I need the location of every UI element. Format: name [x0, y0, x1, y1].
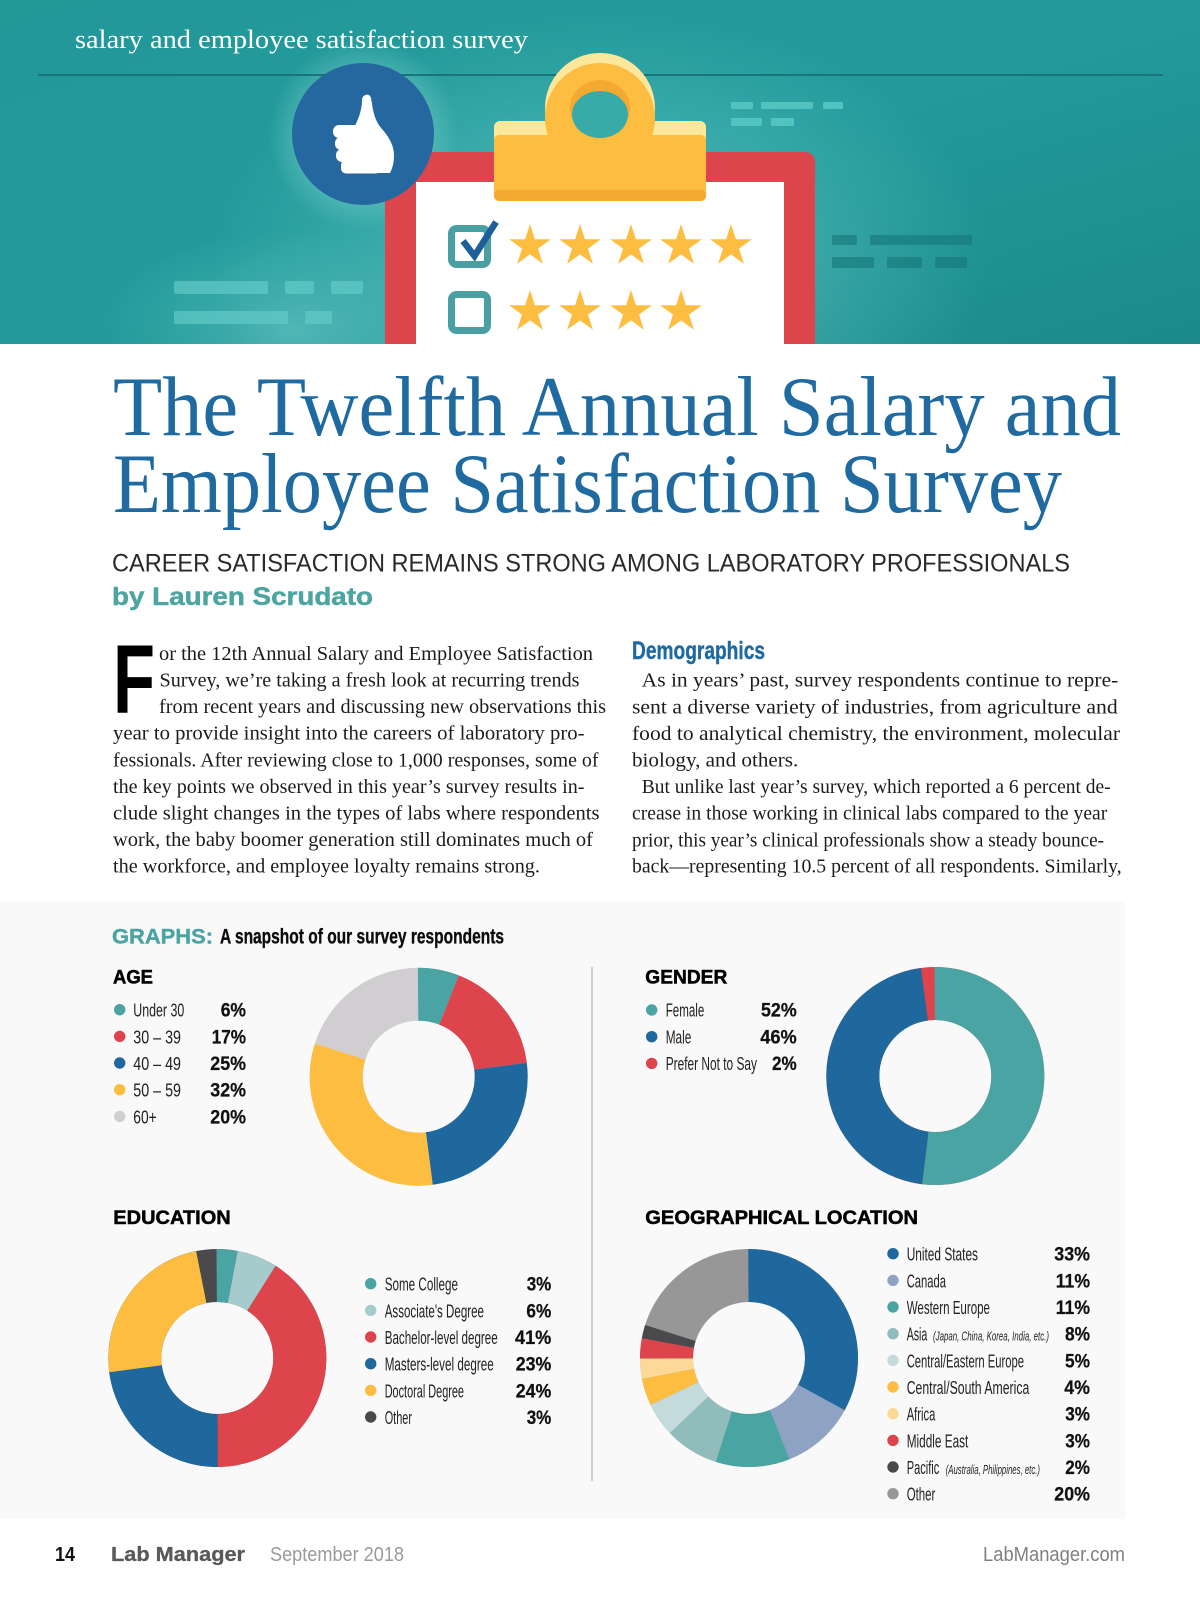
header rule: [38, 74, 1163, 76]
age legend: 50 – 59: [133, 1080, 181, 1101]
section heading: Demographics: Demographics: [632, 637, 765, 665]
age legend: 20%: [210, 1106, 246, 1128]
body text: right column: But unlike last year’s survey, which reported a 6 percent de-: [642, 776, 1111, 798]
body text: right column: prior, this year’s clinical professionals show a steady bounce-: [632, 829, 1104, 851]
geographical location legend: Middle East: [907, 1430, 968, 1451]
geographical location legend: 3%: [1065, 1430, 1090, 1452]
education panel: [113, 1207, 551, 1440]
header banner illustration: [0, 0, 1200, 344]
geographical location heading: GEOGRAPHICAL LOCATION: [645, 1207, 918, 1229]
age legend: 30 – 39: [133, 1026, 181, 1047]
geographical location donut chart: [666, 1276, 832, 1440]
body text: left column: the key points we observed in this year’s survey results in-: [113, 776, 585, 798]
education legend: Doctoral Degree: [385, 1380, 464, 1401]
geographical location legend: (Australia, Philippines, etc.): [946, 1462, 1040, 1477]
geographical location legend: 2%: [1065, 1457, 1090, 1479]
geographical location legend: Central/Eastern Europe: [907, 1350, 1024, 1371]
education legend: Other: [385, 1407, 412, 1428]
body text: right column: biology, and others.: [632, 750, 798, 772]
body text: right column: As in years’ past, survey respondents continue to repre-: [642, 670, 1118, 692]
body text: right column: sent a diverse variety of industries, from agriculture and: [632, 696, 1118, 718]
geographical location legend: 11%: [1056, 1297, 1090, 1319]
education legend: 24%: [516, 1380, 551, 1402]
gender donut chart: [853, 994, 1018, 1158]
age legend: 6%: [221, 1000, 246, 1022]
education legend: Associate's Degree: [385, 1300, 484, 1321]
education legend: 3%: [527, 1407, 551, 1429]
body text: left column: or the 12th Annual Salary and Employee Satisfaction: [159, 643, 593, 665]
gender panel: [645, 966, 1018, 1158]
education legend: Masters-level degree: [385, 1354, 494, 1375]
body text: left column: clude slight changes in the types of labs where respondents: [113, 802, 600, 824]
geographical location legend: United States: [907, 1244, 978, 1265]
graphs heading: [112, 925, 504, 948]
body text: left column: [113, 624, 606, 878]
page number: 14: [55, 1544, 76, 1566]
geographical location legend: 4%: [1064, 1377, 1090, 1399]
gender legend: Prefer Not to Say: [666, 1053, 757, 1074]
geographical location legend: 11%: [1056, 1270, 1090, 1292]
gender legend: [646, 1000, 797, 1075]
education legend: 3%: [527, 1274, 551, 1296]
decorative data bars: lower right: [832, 235, 972, 268]
byline: by Lauren Scrudato: [112, 583, 373, 611]
decorative data bars: lower left: [174, 281, 363, 324]
education legend: 23%: [516, 1354, 551, 1376]
geographical location legend: (Japan, China, Korea, India, etc.): [933, 1329, 1049, 1344]
title: Employee Satisfaction Survey: [113, 437, 1062, 531]
geographical location legend: 33%: [1054, 1244, 1090, 1266]
graphs heading: A snapshot of our survey respondents: [220, 925, 504, 948]
body text: right column: crease in those working in clinical labs compared to the year: [632, 803, 1107, 825]
geographical location legend: Asia: [907, 1324, 928, 1345]
age legend: 17%: [212, 1026, 246, 1048]
five star rating row: [509, 224, 752, 264]
geographical location legend: Canada: [907, 1270, 946, 1291]
four star rating row: [509, 290, 702, 330]
education legend: Some College: [385, 1274, 458, 1295]
age legend: Under 30: [133, 1000, 184, 1021]
graphs heading: GRAPHS:: [112, 925, 213, 948]
education heading: EDUCATION: [113, 1207, 231, 1229]
geographical location legend: Western Europe: [907, 1297, 990, 1318]
website: LabManager.com: [983, 1544, 1125, 1566]
body text: left column: Survey, we’re taking a fresh look at recurring trends: [160, 670, 580, 692]
geographical location legend: Other: [907, 1484, 935, 1505]
geographical location legend: Pacific: [907, 1457, 939, 1478]
education donut chart: [135, 1276, 300, 1440]
panel: graphs: [0, 902, 1125, 1519]
education legend: [365, 1274, 551, 1429]
magazine name: Lab Manager: [111, 1544, 245, 1566]
body text: left column: work, the baby boomer generation still dominates much of: [113, 829, 593, 851]
age panel: [113, 966, 501, 1159]
subtitle: CAREER SATISFACTION REMAINS STRONG AMONG LABORATORY PROFESSIONALS: [112, 550, 1070, 578]
geographical location legend: [887, 1244, 1090, 1506]
geographical location legend: 3%: [1065, 1404, 1090, 1426]
body text: left column: from recent years and discussing new observations this: [159, 696, 606, 718]
geographical location legend: 8%: [1065, 1324, 1090, 1346]
age legend: [114, 1000, 246, 1128]
age legend: 40 – 49: [133, 1053, 181, 1074]
gender legend: 2%: [772, 1053, 797, 1075]
geographical location legend: Africa: [907, 1404, 936, 1425]
body text: left column: year to provide insight into the careers of laboratory pro-: [113, 723, 585, 745]
title: [113, 360, 1121, 531]
body text: right column: back—representing 10.5 percent of all respondents. Similarly,: [632, 856, 1122, 878]
gender heading: GENDER: [645, 966, 727, 988]
footer: [55, 1544, 1125, 1566]
age legend: 60+: [133, 1106, 157, 1127]
title: The Twelfth Annual Salary and: [113, 360, 1121, 454]
drop cap: F: [113, 624, 155, 733]
gender legend: 52%: [761, 1000, 797, 1022]
age legend: 25%: [210, 1053, 246, 1075]
geographical location legend: 5%: [1065, 1350, 1090, 1372]
decorative data bars: upper right: [731, 102, 843, 126]
icon: gold clipboard clip: [494, 53, 706, 201]
header label: salary and employee satisfaction survey: [75, 25, 528, 54]
education legend: 41%: [515, 1327, 551, 1349]
icon: thumbs up badge: [292, 63, 434, 205]
age heading: AGE: [113, 966, 153, 988]
education legend: 6%: [526, 1300, 551, 1322]
body text: right column: [632, 670, 1122, 878]
clipboard board: [385, 152, 815, 344]
issue date: September 2018: [270, 1544, 404, 1566]
gender legend: Male: [666, 1026, 691, 1047]
body text: left column: the workforce, and employee loyalty remains strong.: [113, 856, 540, 878]
icon: empty checkbox: [452, 294, 488, 330]
education legend: Bachelor-level degree: [385, 1327, 498, 1348]
body text: left column: fessionals. After reviewing close to 1,000 responses, some of: [113, 749, 599, 771]
geographical location legend: 20%: [1054, 1484, 1090, 1506]
geographical location panel: [645, 1207, 1090, 1506]
gender legend: Female: [666, 1000, 704, 1021]
gender legend: 46%: [760, 1026, 797, 1048]
icon: checked box with check mark: [452, 222, 496, 264]
age legend: 32%: [210, 1080, 246, 1102]
age donut chart: [336, 994, 501, 1159]
geographical location legend: Central/South America: [907, 1377, 1030, 1398]
body text: right column: food to analytical chemistry, the environment, molecular: [632, 723, 1120, 745]
